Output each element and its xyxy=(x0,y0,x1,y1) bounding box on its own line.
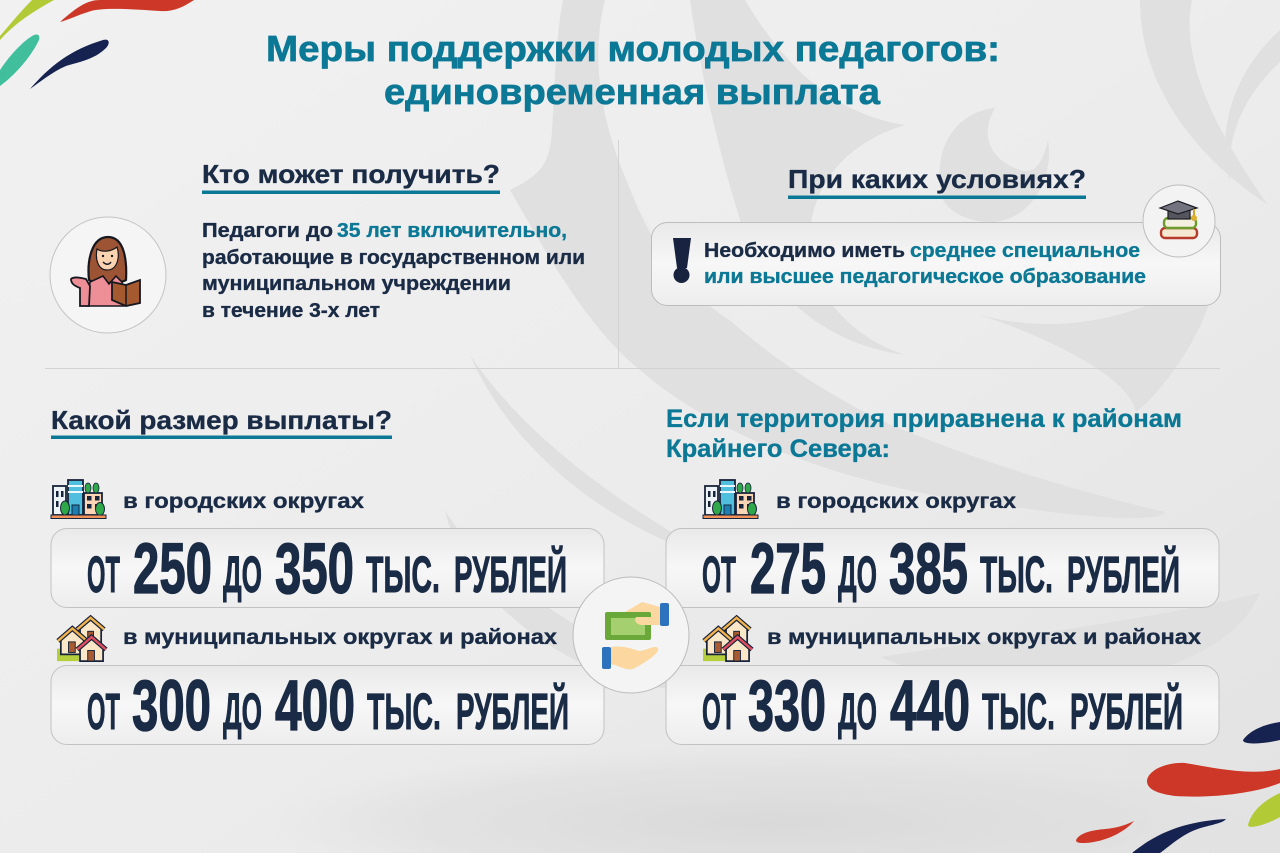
text: who can receive: Педагоги до xyxy=(202,220,333,242)
panel: amount 275–385: ОТ xyxy=(702,546,736,603)
dividers xyxy=(45,140,1220,368)
text: who can receive xyxy=(202,220,585,322)
heading: far north xyxy=(666,405,1182,463)
text: condition: Необходимо иметь xyxy=(704,240,905,262)
text: who can receive: работающие в государственном или xyxy=(202,247,585,269)
panel: conditions callout xyxy=(652,222,1220,306)
icon: books and graduation cap xyxy=(1143,185,1215,257)
panel: amount 330–440: ДО xyxy=(838,683,877,740)
icon: city xyxy=(703,480,758,518)
label: municipal districts: в муниципальных округах и районах xyxy=(767,626,1201,649)
panel: amount 330–440: ТЫС. xyxy=(982,683,1055,740)
panel: amount 300–400: ДО xyxy=(223,683,262,740)
label: urban districts: в городских округах xyxy=(123,490,364,513)
panel: amount 330–440: 330 xyxy=(748,667,826,746)
panel: amount 300–400: РУБЛЕЙ xyxy=(456,682,569,740)
panel: amount 275–385: ТЫС. xyxy=(980,546,1053,603)
panel: amount 275–385 xyxy=(666,528,1219,609)
label: urban districts: в городских округах xyxy=(776,490,1016,513)
title: единовременная выплата xyxy=(384,71,881,112)
panel: amount 250–350: ОТ xyxy=(87,546,120,603)
heading: payment size: Какой размер выплаты? xyxy=(51,405,392,435)
label: municipal districts: в муниципальных округах и районах xyxy=(123,626,557,649)
panel: amount 300–400: ТЫС. xyxy=(367,683,441,740)
decoration: bottom right brush strokes xyxy=(1076,722,1280,853)
left: municipal districts xyxy=(57,618,557,661)
title: Меры поддержки молодых педагогов: xyxy=(266,28,1000,69)
panel: amount 250–350: РУБЛЕЙ xyxy=(454,545,567,603)
heading: far north: Если территория приравнена к районам xyxy=(666,405,1182,433)
panel: amount 330–440 xyxy=(666,666,1219,746)
text: who can receive: муниципальном учреждении xyxy=(202,273,511,295)
panel: amount 330–440: РУБЛЕЙ xyxy=(1070,682,1183,740)
panel: amount 275–385: РУБЛЕЙ xyxy=(1067,545,1180,603)
panel: amount 300–400 xyxy=(51,666,604,746)
panel: amount 250–350: 350 xyxy=(275,530,354,609)
text: who can receive: в течение 3-х лет xyxy=(202,300,380,322)
heading: who can receive: Кто может получить? xyxy=(202,159,500,189)
panel: amount 275–385: 275 xyxy=(750,530,826,609)
title xyxy=(266,28,1000,112)
panel: amount 300–400: 300 xyxy=(132,667,211,746)
heading: far north: Крайнего Севера: xyxy=(666,435,890,463)
text: condition xyxy=(704,240,1146,288)
heading: conditions: При каких условиях? xyxy=(788,164,1086,194)
icon: teacher xyxy=(50,217,166,333)
decoration: top left brush strokes xyxy=(0,0,194,89)
text: condition: или высшее педагогическое образование xyxy=(704,266,1146,288)
panel: amount 250–350 xyxy=(51,528,604,609)
icon: exclamation mark xyxy=(673,238,691,283)
text: who can receive: 35 лет включительно, xyxy=(337,220,567,242)
text: condition: среднее специальное xyxy=(910,240,1140,262)
left: urban districts xyxy=(51,480,364,518)
right: urban districts xyxy=(703,480,1016,518)
panel: amount 275–385: ДО xyxy=(838,546,877,603)
panel: amount 330–440: 440 xyxy=(890,667,970,746)
icon: houses xyxy=(703,618,752,661)
panel: amount 275–385: 385 xyxy=(889,530,968,609)
icon: houses xyxy=(57,618,106,661)
panel: amount 300–400: 400 xyxy=(275,667,355,746)
panel: amount 250–350: ДО xyxy=(223,546,262,603)
icon: hands exchanging money xyxy=(573,577,689,693)
panel: amount 250–350: ТЫС. xyxy=(366,546,440,603)
icon: city xyxy=(51,480,106,518)
panel: amount 330–440: ОТ xyxy=(702,683,736,740)
background swirl pattern xyxy=(445,0,1280,690)
panel: amount 250–350: 250 xyxy=(133,530,212,609)
panel: amount 300–400: ОТ xyxy=(87,683,120,740)
right: municipal districts xyxy=(703,618,1201,661)
